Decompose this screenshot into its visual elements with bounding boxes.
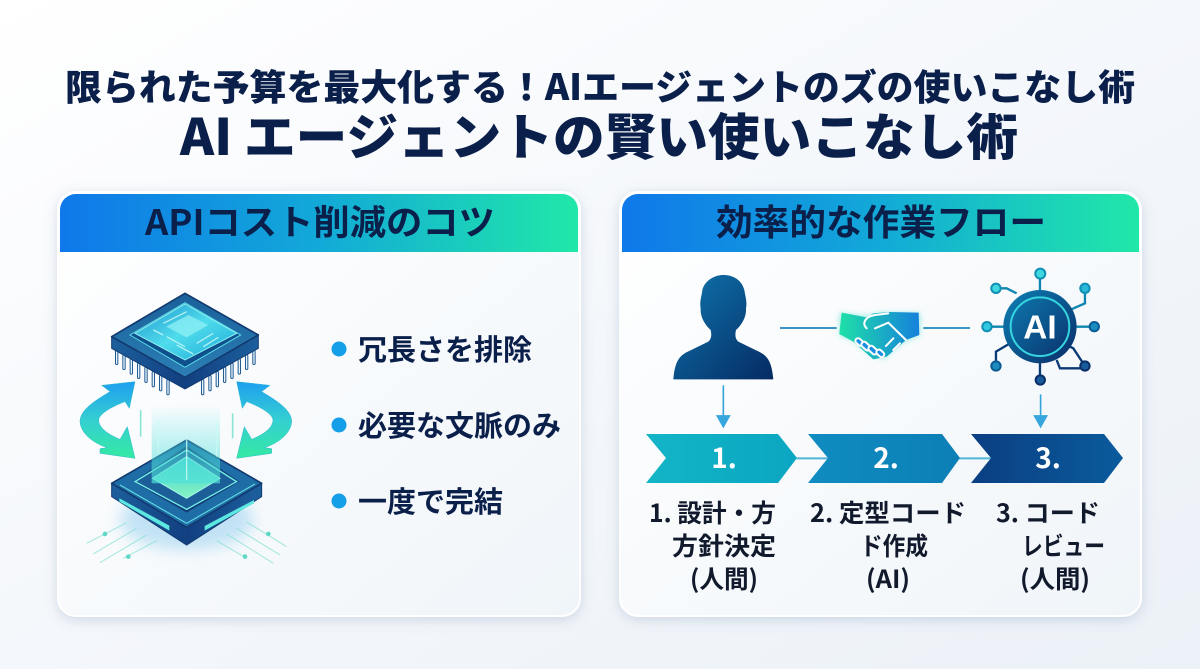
connector lines [780, 325, 970, 330]
arrow: person to step 1 [717, 385, 729, 427]
step 3 label: (人間) [1020, 560, 1090, 596]
panel heading: 効率的な作業フロー [716, 194, 1046, 246]
arrow: AI to step 3 [1035, 394, 1047, 427]
panel background [58, 192, 580, 616]
flow diagram [673, 269, 1099, 458]
icon: chips with refresh arrows [80, 293, 292, 563]
panel: API cost reduction [58, 192, 580, 616]
step 2 label: 2. 定型コード [810, 494, 966, 530]
icon: handshake [839, 312, 920, 359]
title line 1: 限られた予算を最大化する！AIエージェントのズの使いこなし術 [65, 59, 1135, 111]
step 3 label [996, 494, 1105, 596]
chevron connectors [797, 455, 992, 461]
title [65, 59, 1135, 170]
panel: efficient workflow [620, 192, 1141, 616]
icon: AI chip: AI [1023, 310, 1057, 347]
bullet 1: 冗長さを排除 [358, 327, 532, 369]
panel header [622, 194, 1139, 252]
bullet 3: 一度で完結 [358, 479, 503, 521]
chevron 3: 3. [1035, 437, 1061, 477]
step 1 label: (人間) [690, 560, 758, 596]
title line 2: AI エージェントの賢い使いこなし術 [179, 98, 1018, 170]
step 3 label: 3. コード [996, 494, 1100, 530]
bullet list [332, 327, 561, 521]
step 1 label: 1. 設計・方 [649, 494, 776, 530]
chevron 1 [646, 434, 797, 483]
panel background [620, 192, 1141, 616]
panel header [60, 194, 578, 252]
chevron 1: 1. [711, 437, 737, 477]
icon: AI chip [982, 269, 1099, 385]
step 3 label: レビュー [1022, 527, 1105, 563]
step 2 label: (AI) [866, 560, 910, 596]
step 2 label [810, 494, 966, 596]
panel heading: APIコスト削減のコツ [144, 195, 495, 246]
step 1 label: 方針決定 [672, 527, 776, 563]
step 2 label: ド作成 [860, 527, 928, 563]
bullet 2: 必要な文脈のみ [358, 403, 561, 445]
chevron 3 [971, 434, 1123, 483]
chevron 2: 2. [873, 437, 899, 477]
step 1 label [649, 494, 776, 596]
icon: person [673, 275, 773, 379]
chevron 2 [808, 434, 960, 483]
